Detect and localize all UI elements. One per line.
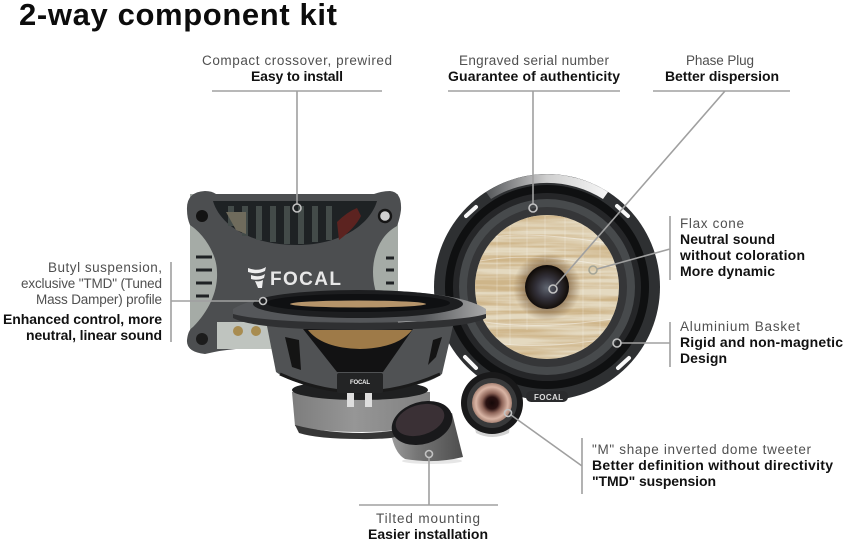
side speaker	[233, 290, 486, 439]
flax cone	[474, 214, 620, 360]
callout: crossover: Easy to install	[251, 68, 343, 84]
callout: aluminium basket: Design	[680, 350, 727, 366]
callout: tweeter: "M" shape inverted dome tweeter	[592, 442, 812, 457]
callout: phase plug: Phase Plug	[686, 53, 754, 68]
crossover metal plate	[187, 191, 401, 354]
crossover logo: FOCAL	[270, 269, 341, 290]
callout: butyl suspension: neutral, linear sound	[26, 327, 162, 343]
callout: tweeter: Better definition without directivity	[592, 457, 833, 473]
callout: aluminium basket: Rigid and non-magnetic	[680, 334, 843, 350]
callout: flax cone: Flax cone	[680, 216, 744, 231]
tilted tweeter	[386, 394, 463, 464]
callout: tweeter: "TMD" suspension	[592, 473, 716, 489]
crossover logo	[248, 267, 341, 290]
crossover window with components	[213, 201, 377, 245]
callout: butyl suspension: Butyl suspension,	[48, 260, 162, 275]
callout: phase plug: Better dispersion	[665, 68, 779, 84]
callout: butyl suspension: Enhanced control, more	[3, 311, 162, 327]
dust cap phase plug	[525, 265, 569, 309]
callout: flax cone: Neutral sound	[680, 231, 775, 247]
terminal	[337, 373, 383, 407]
callout: flax cone	[589, 216, 805, 280]
crossover side slots	[196, 257, 394, 296]
callout: flax cone: without coloration	[679, 247, 805, 263]
callout: serial number: Guarantee of authenticity	[448, 68, 620, 84]
terminal: FOCAL	[350, 380, 370, 386]
crossover	[187, 191, 401, 354]
callout: butyl suspension: exclusive "TMD" (Tuned	[21, 276, 162, 291]
callout: tilted mounting	[359, 450, 498, 542]
callout: crossover: Compact crossover, prewired	[202, 53, 392, 68]
callout: butyl suspension: Mass Damper) profile	[36, 292, 162, 307]
front logo plate: FOCAL	[534, 393, 563, 402]
callout: butyl suspension	[3, 260, 266, 343]
callout: tilted mounting: Tilted mounting	[376, 511, 480, 526]
front logo plate	[526, 391, 568, 402]
basket	[267, 326, 453, 390]
tweeter front view	[461, 372, 523, 437]
callout: crossover	[202, 53, 392, 212]
callout: tilted mounting: Easier installation	[368, 526, 488, 542]
callout: tweeter	[504, 410, 833, 494]
callout: serial number	[448, 53, 620, 212]
callout: phase plug	[549, 53, 790, 293]
front speaker	[434, 174, 660, 402]
callout: flax cone: More dynamic	[680, 263, 775, 279]
magnet	[292, 392, 430, 432]
callout: aluminium basket: Aluminium Basket	[680, 319, 800, 334]
rim	[233, 290, 486, 322]
callout: aluminium basket	[613, 319, 843, 367]
callout: serial number: Engraved serial number	[459, 53, 610, 68]
